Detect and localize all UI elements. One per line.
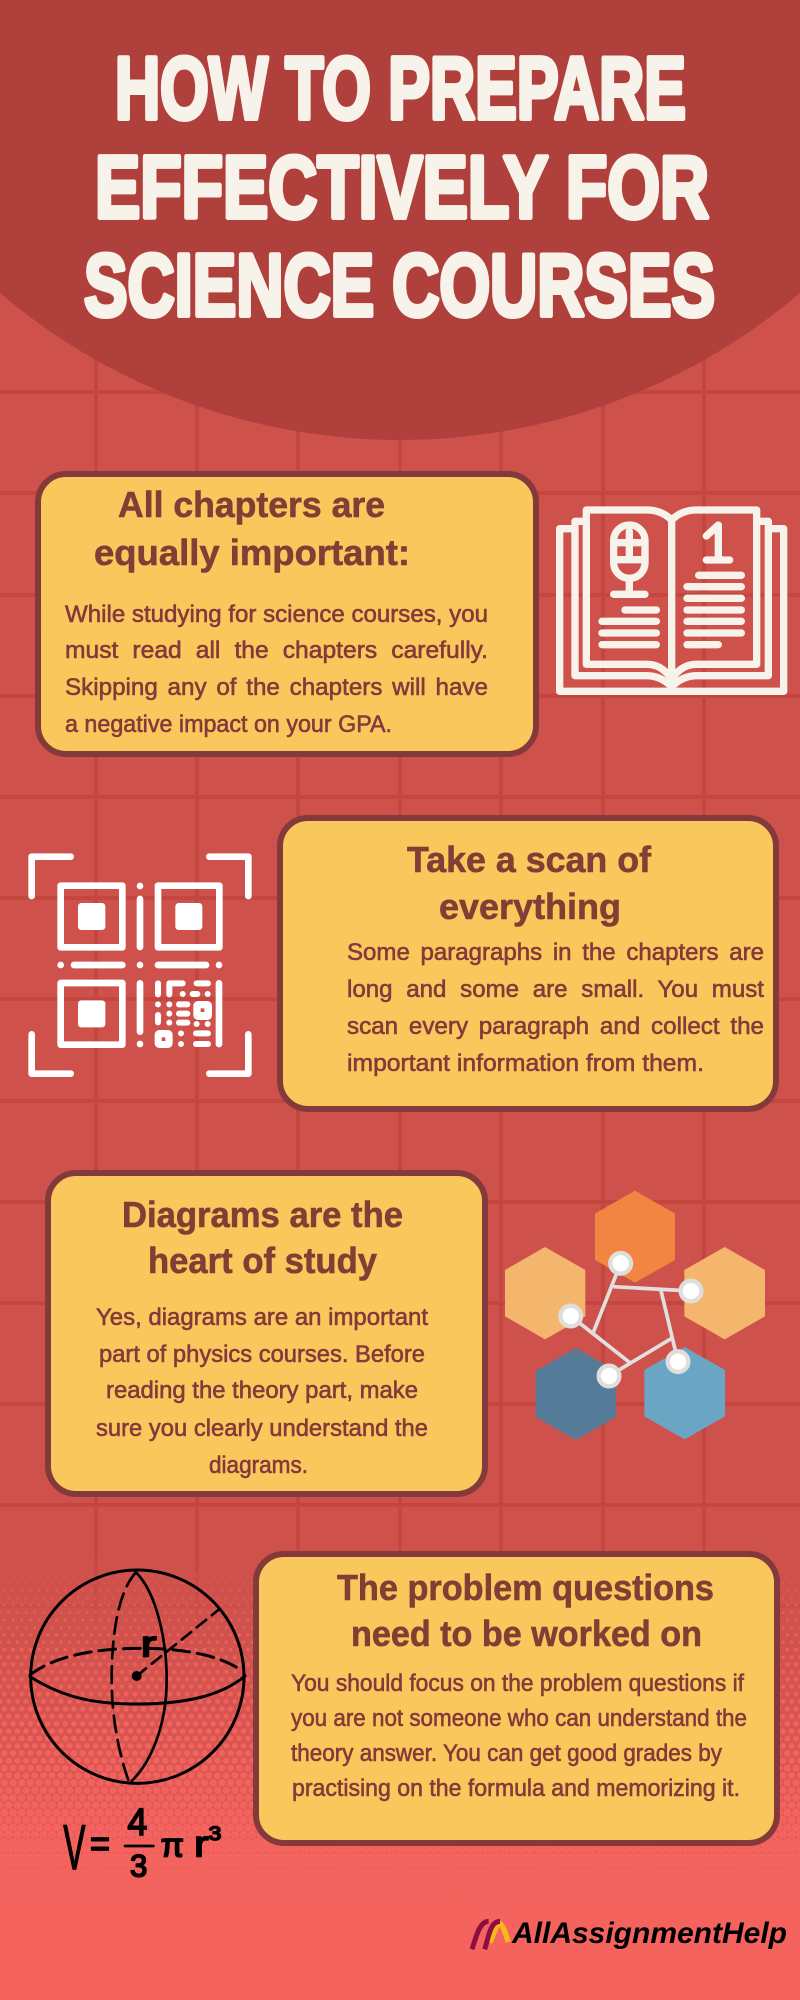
panel: all chapters are equally important <box>38 474 536 754</box>
card body text: practising on the formula and memorizing it. <box>292 1775 740 1802</box>
halftone dots <box>0 1572 800 1906</box>
card heading: equally important: <box>94 532 410 573</box>
icon: sphere with volume formula: r <box>194 1824 209 1865</box>
icon: hexagon network <box>505 1191 765 1440</box>
icon: sphere with volume formula: 3 <box>209 1824 221 1845</box>
icon: open book <box>560 510 784 691</box>
panel: diagrams are the heart of study <box>48 1173 485 1494</box>
icon: sphere with volume formula: r <box>141 1624 157 1665</box>
logo wordmark: AllAssignmentHelp <box>511 1917 787 1950</box>
card heading: heart of study <box>148 1240 377 1281</box>
icon: QR code <box>32 857 248 1074</box>
card heading <box>337 1567 714 1654</box>
card body text: Yes, diagrams are an important <box>96 1304 428 1331</box>
card heading: Take a scan of <box>407 839 652 880</box>
card background <box>48 1173 485 1494</box>
icon: sphere with volume formula: 4 <box>127 1801 147 1844</box>
icon: sphere with volume formula: = <box>90 1823 110 1864</box>
icon: sphere with volume formula: 3 <box>130 1848 147 1884</box>
card body text <box>291 1670 747 1802</box>
card body text <box>347 939 764 1077</box>
header semicircle <box>0 0 800 440</box>
card heading: everything <box>439 886 621 927</box>
card heading: All chapters are <box>118 484 385 525</box>
card body text: reading the theory part, make <box>106 1377 418 1404</box>
card background <box>280 818 776 1109</box>
card body text: part of physics courses. Before <box>99 1341 425 1368</box>
card heading <box>122 1194 403 1281</box>
card body text <box>65 601 488 738</box>
icon: sphere with volume formula <box>30 1570 245 1884</box>
bottom gradient <box>0 1540 800 1905</box>
icon: sphere with volume formula: π <box>161 1828 184 1865</box>
bottom solid band <box>0 1905 800 2000</box>
card body text: important information from them. <box>347 1050 704 1077</box>
card body text: you are not someone who can understand the <box>291 1705 747 1732</box>
background grid <box>0 280 800 1660</box>
card body text: diagrams. <box>209 1452 308 1479</box>
card background <box>256 1554 777 1843</box>
logo mark <box>472 1921 508 1949</box>
card body text: must read all the chapters carefully. <box>65 637 488 664</box>
card body text <box>96 1304 428 1479</box>
card body text: While studying for science courses, you <box>65 601 488 628</box>
panel: the problem questions need to be worked on <box>256 1554 777 1843</box>
card heading <box>94 484 410 573</box>
card body text: long and some are small. You must <box>347 976 764 1003</box>
card background <box>38 474 536 754</box>
title <box>84 38 715 334</box>
card body text: Some paragraphs in the chapters are <box>347 939 764 966</box>
card body text: sure you clearly understand the <box>96 1415 428 1442</box>
card heading: The problem questions <box>337 1567 714 1608</box>
card body text: You should focus on the problem questions if <box>291 1670 744 1697</box>
logo: AllAssignmentHelp <box>472 1917 787 1950</box>
card body text: scan every paragraph and collect the <box>347 1013 764 1040</box>
card heading: need to be worked on <box>351 1613 702 1654</box>
card body text: Skipping any of the chapters will have <box>65 674 488 701</box>
panel: take a scan of everything <box>280 818 776 1109</box>
icon: sphere with volume formula: V <box>63 1813 85 1883</box>
card heading: Diagrams are the <box>122 1194 403 1235</box>
card body text: theory answer. You can get good grades by <box>291 1740 722 1767</box>
card heading <box>407 839 652 927</box>
card body text: a negative impact on your GPA. <box>65 711 392 738</box>
